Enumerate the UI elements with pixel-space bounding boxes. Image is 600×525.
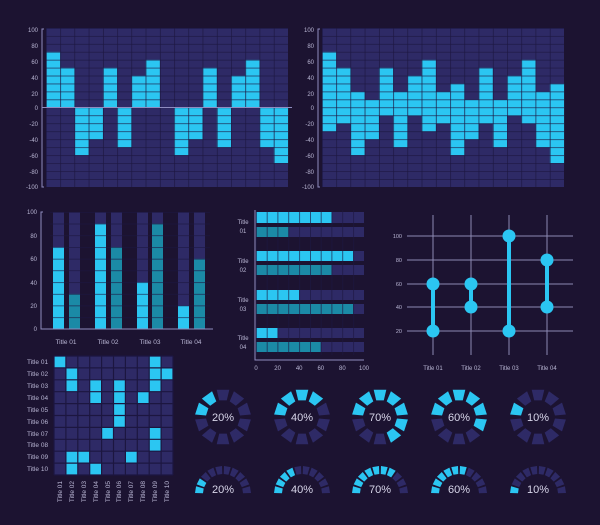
chart: horizontal grouped bars: Title <box>237 298 249 304</box>
chart: diverging bar chart 1: 40 <box>31 76 39 82</box>
chart: horizontal grouped bars <box>237 210 370 372</box>
chart: heatmap matrix: Title 04 <box>93 481 100 502</box>
chart: heatmap matrix: Title 09 <box>152 481 159 502</box>
chart: heatmap matrix: Title 01 <box>57 481 64 502</box>
chart: horizontal grouped bars: 0 <box>254 366 258 372</box>
chart: horizontal grouped bars: Title <box>237 220 249 226</box>
chart: range bar chart 2: -40 <box>305 138 315 144</box>
chart: heatmap matrix: Title 10 <box>164 481 171 502</box>
chart: heatmap matrix: Title 07 <box>27 431 48 438</box>
chart: dumbbell range chart: Title 03 <box>499 366 519 372</box>
chart: vertical grouped bars: Title 04 <box>180 339 202 346</box>
chart: range bar chart 2: 60 <box>307 60 315 66</box>
chart: vertical grouped bars <box>27 210 213 346</box>
chart: heatmap matrix: Title 02 <box>27 371 48 378</box>
chart: heatmap matrix: Title 08 <box>27 442 48 449</box>
gauge: 10% ring: 10% <box>527 412 549 424</box>
chart: horizontal grouped bars: Title <box>237 336 249 342</box>
chart: vertical grouped bars: 60 <box>30 257 38 263</box>
chart: range bar chart 2: -60 <box>305 154 315 160</box>
gauge: 20% ring: 20% <box>212 412 234 424</box>
chart: vertical grouped bars: 100 <box>27 210 38 216</box>
chart: heatmap matrix: Title 05 <box>27 407 48 414</box>
gauge: 10% half <box>510 466 566 496</box>
chart: horizontal grouped bars: 03 <box>240 307 247 313</box>
gauge: 10% ring <box>510 390 566 444</box>
gauge: 60% half: 60% <box>448 484 470 496</box>
gauge: 40% ring <box>274 390 330 444</box>
gauge: 40% ring: 40% <box>291 412 313 424</box>
chart: diverging bar chart 1: 0 <box>35 106 39 112</box>
chart: horizontal grouped bars: 60 <box>317 366 325 372</box>
chart: diverging bar chart 1: -20 <box>29 122 39 128</box>
chart: dumbbell range chart: Title 02 <box>461 366 481 372</box>
chart: diverging bar chart 1 <box>26 28 292 191</box>
chart: vertical grouped bars: Title 02 <box>97 339 119 346</box>
chart: range bar chart 2: -100 <box>302 185 315 191</box>
gauge: 60% ring <box>431 390 487 444</box>
chart: horizontal grouped bars: 04 <box>240 345 247 351</box>
chart: heatmap matrix <box>27 356 173 502</box>
chart: range bar chart 2: 0 <box>311 106 315 112</box>
chart: horizontal grouped bars: 80 <box>339 366 346 372</box>
chart: diverging bar chart 1: 100 <box>28 28 39 34</box>
chart: diverging bar chart 1: 60 <box>31 60 39 66</box>
chart: dumbbell range chart: 100 <box>393 234 402 240</box>
chart: vertical grouped bars: Title 01 <box>55 339 77 346</box>
chart: heatmap matrix: Title 08 <box>140 481 147 502</box>
chart: horizontal grouped bars: 02 <box>240 268 247 274</box>
gauge: 60% half <box>431 466 487 496</box>
chart: dumbbell range chart: 60 <box>396 282 402 288</box>
chart: range bar chart 2: 40 <box>307 76 315 82</box>
chart: heatmap matrix: Title 10 <box>27 466 48 473</box>
chart: range bar chart 2: 80 <box>307 44 315 50</box>
gauge: 10% half: 10% <box>527 484 549 496</box>
chart: vertical grouped bars: 80 <box>30 234 38 240</box>
gauge: 60% ring: 60% <box>448 412 470 424</box>
chart: diverging bar chart 1: -100 <box>26 185 39 191</box>
chart: horizontal grouped bars: Title <box>237 259 249 265</box>
chart: range bar chart 2: 20 <box>307 92 315 98</box>
chart: diverging bar chart 1: 20 <box>31 92 39 98</box>
chart: heatmap matrix: Title 03 <box>27 383 48 390</box>
chart: dumbbell range chart: 80 <box>396 258 402 264</box>
chart: heatmap matrix: Title 03 <box>81 481 88 502</box>
gauge: 20% half: 20% <box>212 484 234 496</box>
chart: dumbbell range chart: 20 <box>396 329 402 335</box>
chart: horizontal grouped bars: 20 <box>274 366 282 372</box>
chart: diverging bar chart 1: 80 <box>31 44 39 50</box>
chart: dumbbell range chart: Title 01 <box>423 366 443 372</box>
chart: heatmap matrix: Title 04 <box>27 395 48 402</box>
chart: heatmap matrix: Title 09 <box>27 454 48 461</box>
chart: dumbbell range chart: 40 <box>396 305 402 311</box>
gauge: 70% ring <box>352 390 408 444</box>
gauge: 20% half <box>195 466 251 496</box>
chart: heatmap matrix: Title 01 <box>27 359 48 366</box>
chart: heatmap matrix: Title 06 <box>116 481 123 502</box>
chart: dumbbell range chart: Title 04 <box>537 366 557 372</box>
chart: vertical grouped bars: 0 <box>34 327 38 333</box>
gauge: 20% ring <box>195 390 251 444</box>
chart: horizontal grouped bars: 100 <box>359 366 370 372</box>
chart: range bar chart 2 <box>302 28 564 191</box>
chart: dumbbell range chart <box>393 215 573 372</box>
chart: diverging bar chart 1: -60 <box>29 154 39 160</box>
chart: heatmap matrix: Title 06 <box>27 419 48 426</box>
chart: heatmap matrix: Title 02 <box>69 481 76 502</box>
chart: diverging bar chart 1: -80 <box>29 170 39 176</box>
chart: heatmap matrix: Title 05 <box>105 481 112 502</box>
chart: range bar chart 2: 100 <box>304 28 315 34</box>
gauge: 70% ring: 70% <box>369 412 391 424</box>
chart: heatmap matrix: Title 07 <box>128 481 135 502</box>
chart: range bar chart 2: -80 <box>305 170 315 176</box>
gauge: 70% half: 70% <box>369 484 391 496</box>
chart: horizontal grouped bars: 40 <box>296 366 303 372</box>
gauge: 70% half <box>352 466 408 496</box>
chart: vertical grouped bars: 40 <box>30 281 38 287</box>
chart: vertical grouped bars: Title 03 <box>139 339 161 346</box>
chart: vertical grouped bars: 20 <box>30 304 38 310</box>
chart: range bar chart 2: -20 <box>305 122 315 128</box>
chart: diverging bar chart 1: -40 <box>29 138 39 144</box>
gauge: 40% half <box>274 466 330 496</box>
chart: horizontal grouped bars: 01 <box>240 229 247 235</box>
gauge: 40% half: 40% <box>291 484 313 496</box>
